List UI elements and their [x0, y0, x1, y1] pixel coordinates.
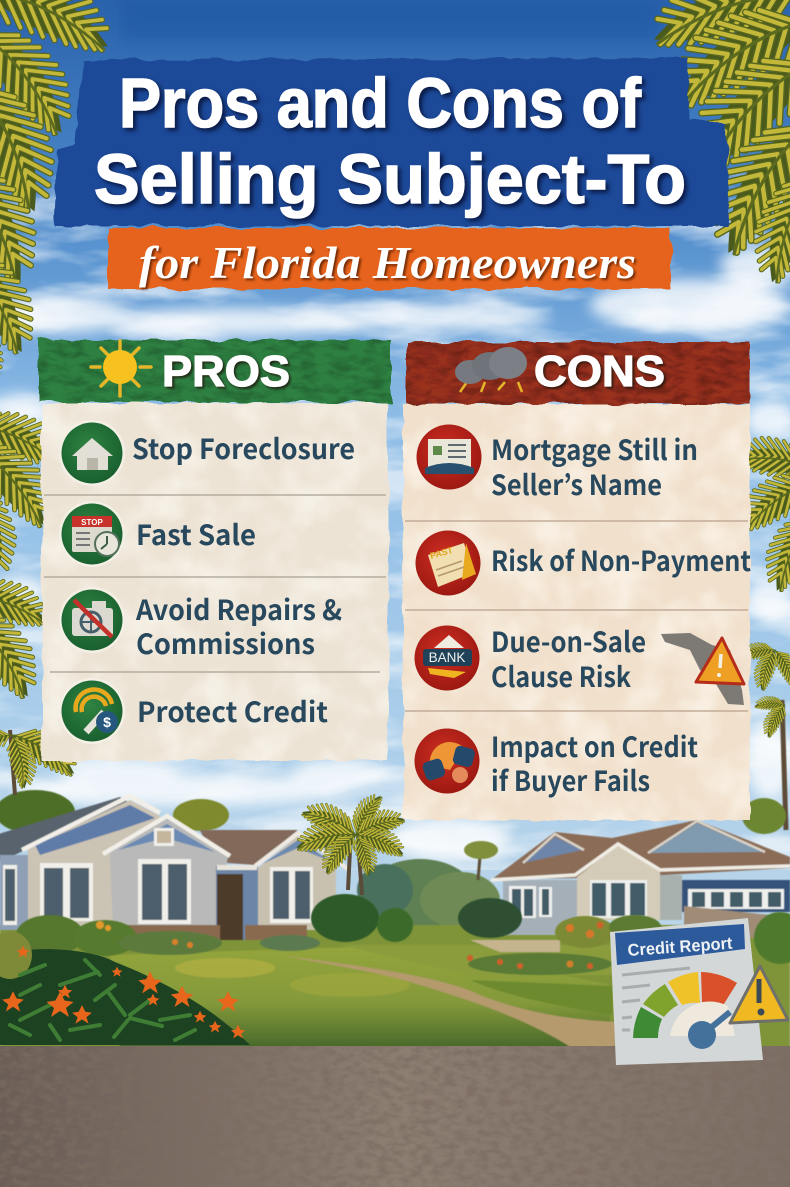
pros list background [42, 403, 388, 761]
title text: Selling Subject-To [94, 140, 686, 218]
icon: calendar and clock: STOP [81, 518, 103, 527]
item: due-on-sale [414, 621, 744, 705]
palm fronds: top left [0, 0, 123, 396]
panel: pros [40, 340, 391, 761]
cons header band [407, 342, 750, 404]
item: fast sale [59, 501, 256, 567]
heading: cons: CONS [534, 347, 665, 396]
item: impact on credit [414, 726, 698, 800]
item: mortgage: Mortgage Still in [491, 429, 698, 469]
icon: signal and dollar [59, 678, 125, 744]
icon: calendar and clock [59, 501, 125, 567]
palm fronds: right side [728, 432, 790, 739]
item: impact on credit: if Buyer Fails [491, 760, 650, 800]
left shrubs [16, 894, 413, 956]
title banner [54, 58, 728, 289]
item: stop foreclosure: Stop Foreclosure [132, 428, 355, 468]
item: avoid repairs: Commissions [136, 623, 315, 663]
item: due-on-sale: Clause Risk [491, 656, 631, 696]
icon: past due notice: PAST [429, 545, 454, 561]
item: non-payment [416, 530, 751, 596]
icon: sun [91, 341, 151, 396]
icon: past due notice [416, 530, 480, 596]
icon: warning triangle [730, 966, 788, 1023]
background trees [0, 700, 786, 931]
center palm tree [293, 788, 409, 895]
road [0, 1046, 790, 1187]
item: protect credit [59, 678, 328, 744]
credit report card [610, 918, 788, 1065]
foreground flower bed [0, 931, 250, 1045]
item: non-payment: Risk of Non-Payment [491, 540, 751, 580]
icon: bank: BANK [429, 650, 465, 665]
lawn and garden ground [0, 925, 790, 1055]
icon: crossed-out cash [59, 587, 125, 653]
icon: signal and dollar: $ [103, 714, 111, 730]
gauge [633, 972, 737, 1049]
icon: padlocks [414, 728, 480, 794]
icon: bank [414, 626, 480, 690]
item: stop foreclosure [59, 420, 355, 486]
icon: house [59, 420, 125, 486]
pros header band [40, 340, 391, 402]
cons list background [403, 404, 750, 820]
right house [491, 820, 790, 938]
panel: cons [403, 342, 751, 820]
report paper [610, 918, 763, 1065]
icon: mortgage book [416, 424, 482, 490]
icon: florida map with warning [661, 633, 744, 705]
item: avoid repairs [59, 587, 342, 663]
subtitle band [108, 228, 670, 289]
garden path [280, 955, 615, 1050]
heading: pros: PROS [162, 347, 290, 396]
icon: storm cloud [455, 347, 527, 392]
right shrubs and flowers [458, 898, 790, 975]
item: fast sale: Fast Sale [136, 514, 256, 554]
palm fronds: left side [0, 400, 85, 795]
left house [0, 796, 348, 940]
report header [615, 924, 745, 965]
report title: Credit Report [627, 934, 733, 960]
title text: Pros and Cons of [119, 64, 642, 142]
item: protect credit: Protect Credit [137, 691, 328, 731]
item: due-on-sale: Due-on-Sale [491, 621, 646, 661]
subtitle text: for Florida Homeowners [139, 237, 636, 288]
item: mortgage [416, 424, 698, 504]
item: avoid repairs: Avoid Repairs & [135, 589, 342, 629]
item: impact on credit: Impact on Credit [491, 726, 698, 766]
title text [94, 64, 686, 218]
title band [54, 58, 728, 226]
item: mortgage: Seller’s Name [491, 464, 662, 504]
palm fronds: top right [642, 0, 790, 288]
